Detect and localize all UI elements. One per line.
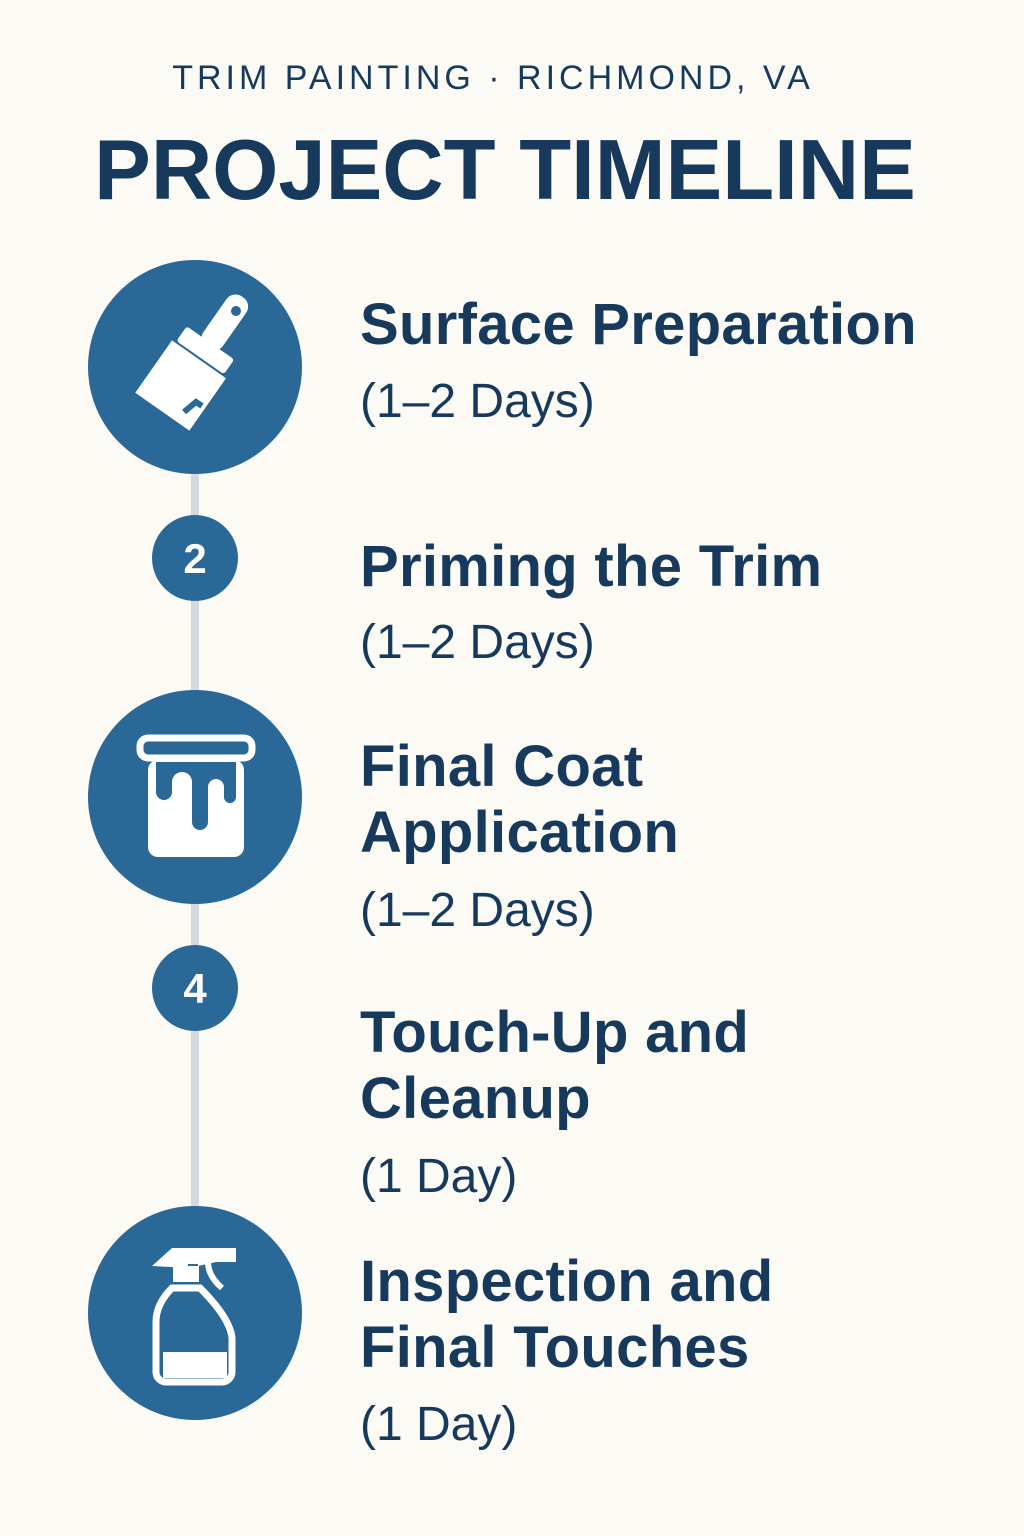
text: Surface Preparation — [360, 292, 917, 357]
text: Final Coat — [360, 734, 643, 799]
text: Touch-Up and — [360, 1000, 749, 1065]
text: Application — [360, 800, 679, 865]
title: PROJECT TIMELINE — [94, 123, 916, 218]
step 2 marker — [152, 515, 238, 601]
text: Cleanup — [360, 1066, 591, 1131]
text: (1 Day) — [360, 1150, 517, 1203]
text: (1–2 Days) — [360, 616, 595, 669]
icon: spray bottle — [88, 1206, 302, 1420]
step 4 text — [360, 1000, 749, 1203]
text: Inspection and — [360, 1249, 773, 1314]
step 2 text — [360, 534, 822, 669]
subtitle: TRIM PAINTING · RICHMOND, VA — [172, 59, 814, 97]
step 3 text — [360, 734, 679, 937]
step 5 text — [360, 1249, 773, 1451]
text: Priming the Trim — [360, 534, 822, 599]
step 4 marker — [152, 945, 238, 1031]
step 4 marker: 4 — [183, 965, 207, 1012]
timeline graphic — [88, 260, 302, 1420]
step 2 marker: 2 — [183, 535, 207, 582]
icon: paintbrush — [88, 260, 302, 474]
step 1 text — [360, 292, 917, 428]
text: Final Touches — [360, 1315, 750, 1380]
text: (1–2 Days) — [360, 884, 595, 937]
text: (1–2 Days) — [360, 375, 595, 428]
icon: paint can — [88, 690, 302, 904]
text: (1 Day) — [360, 1398, 517, 1451]
